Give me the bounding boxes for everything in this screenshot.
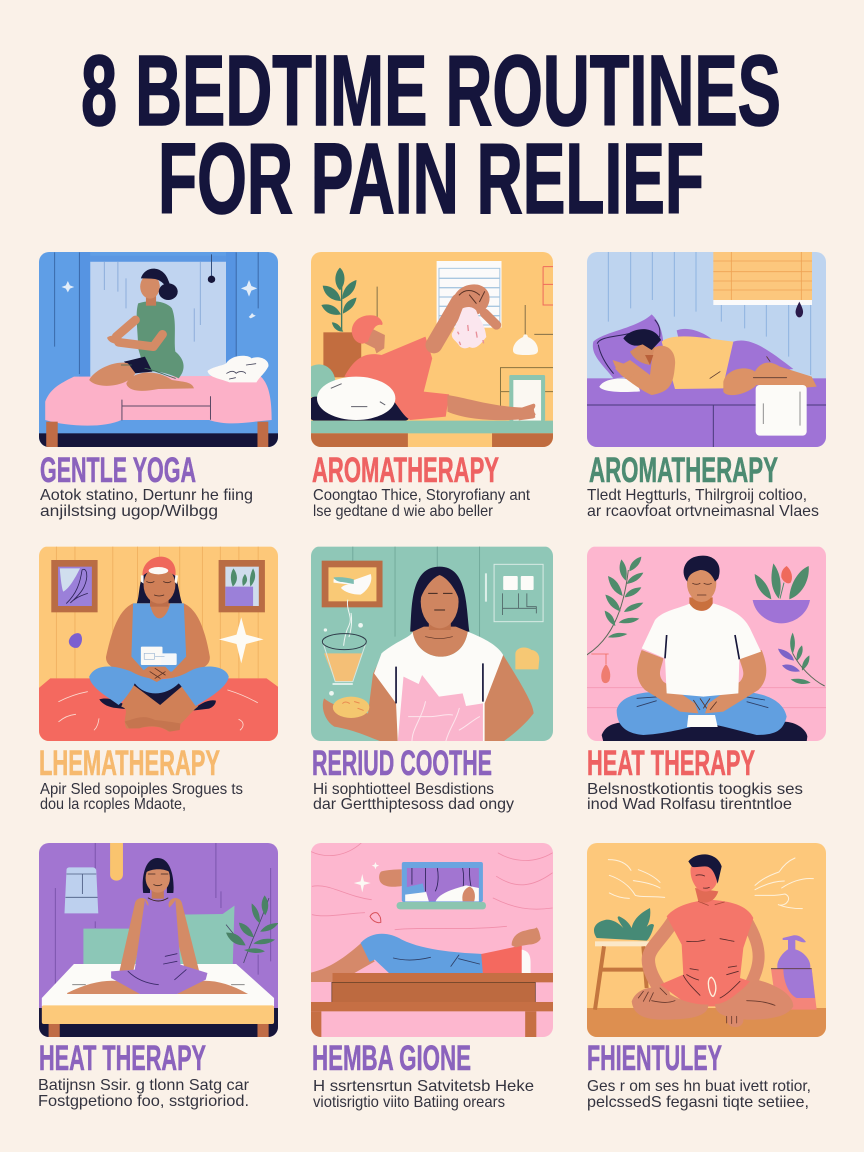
heading: HEAT THERAPY	[587, 744, 755, 783]
heading: RERIUD COOTHE	[312, 744, 492, 783]
description: Belsnostkotiontis toogkis ses	[587, 781, 803, 798]
description	[313, 487, 531, 520]
description	[587, 781, 803, 813]
description: Fostgpetiono foo, sstgrioriod.	[38, 1093, 249, 1110]
description: anjilstsing ugop/Wilbgg	[40, 503, 218, 520]
panel: heat therapy pink	[587, 547, 827, 813]
description	[38, 1077, 250, 1110]
description: dar Gertthiptesoss dad ongy	[313, 796, 514, 813]
description	[40, 781, 243, 813]
illustration: woman stretching on white bed	[38, 843, 280, 1038]
description: lse gedtane d wie abo beller	[313, 503, 494, 520]
illustration: woman with eye mask sitting cross-legged	[38, 547, 280, 742]
description: ar rcaovfoat ortvneimasnal Vlaes	[587, 503, 819, 520]
description: Aotok statino, Dertunr he fiing	[40, 487, 253, 504]
description: Tledt Hegtturls, Thilrgroij coltioo,	[587, 487, 807, 504]
description: Ges r om ses hn buat ivett rotior,	[587, 1078, 811, 1095]
description	[313, 781, 514, 813]
panel: aromatherapy green	[587, 252, 827, 520]
illustration: man massaging with oil bottle	[587, 843, 827, 1038]
panel: reriud coothe	[309, 547, 556, 813]
description: H ssrtensrtun Satvitetsb Heke	[313, 1078, 534, 1095]
illustration: woman meditating on pink bed	[38, 252, 280, 448]
panel: hemba gione	[309, 843, 556, 1111]
illustration: woman with tea and snack	[309, 547, 556, 742]
description: Apir Sled sopoiples Srogues ts	[40, 781, 243, 798]
heading: FHIENTULEY	[587, 1039, 722, 1078]
description: Batijnsn Ssir. g tlonn Satg car	[38, 1077, 250, 1094]
description: inod Wad Rolfasu tirentntloe	[587, 796, 792, 813]
description	[313, 1078, 534, 1111]
panel: aromatherapy coral	[303, 252, 556, 520]
description	[40, 487, 253, 520]
illustration: person reclining with diffuser	[303, 252, 556, 448]
description: Hi sophtiotteel Besdistions	[313, 781, 494, 798]
description: dou la rcoples Mdaote,	[40, 796, 186, 813]
title	[81, 35, 781, 235]
description: viotisrigtio viito Batiing orears	[313, 1094, 505, 1111]
heading: HEMBA GIONE	[312, 1039, 471, 1078]
panel: gentle yoga	[38, 252, 280, 520]
description	[587, 1078, 811, 1111]
illustration: man meditating among plants	[587, 547, 827, 742]
illustration: person lying on wooden bench	[309, 843, 556, 1038]
heading: AROMATHERAPY	[312, 451, 499, 490]
panel: fhientuley	[587, 843, 827, 1111]
heading: LHEMATHERAPY	[39, 744, 220, 783]
illustration: person lying prone on purple bed	[587, 252, 827, 448]
description: pelcssedS fegasni tiqte setiiee,	[587, 1094, 809, 1111]
description	[587, 487, 819, 520]
heading: HEAT THERAPY	[39, 1039, 206, 1078]
description: Coongtao Thice, Storyrofiany ant	[313, 487, 531, 504]
panel: lhematherapy	[38, 547, 280, 813]
heading: GENTLE YOGA	[40, 451, 196, 490]
panel: heat therapy purple	[38, 843, 280, 1110]
